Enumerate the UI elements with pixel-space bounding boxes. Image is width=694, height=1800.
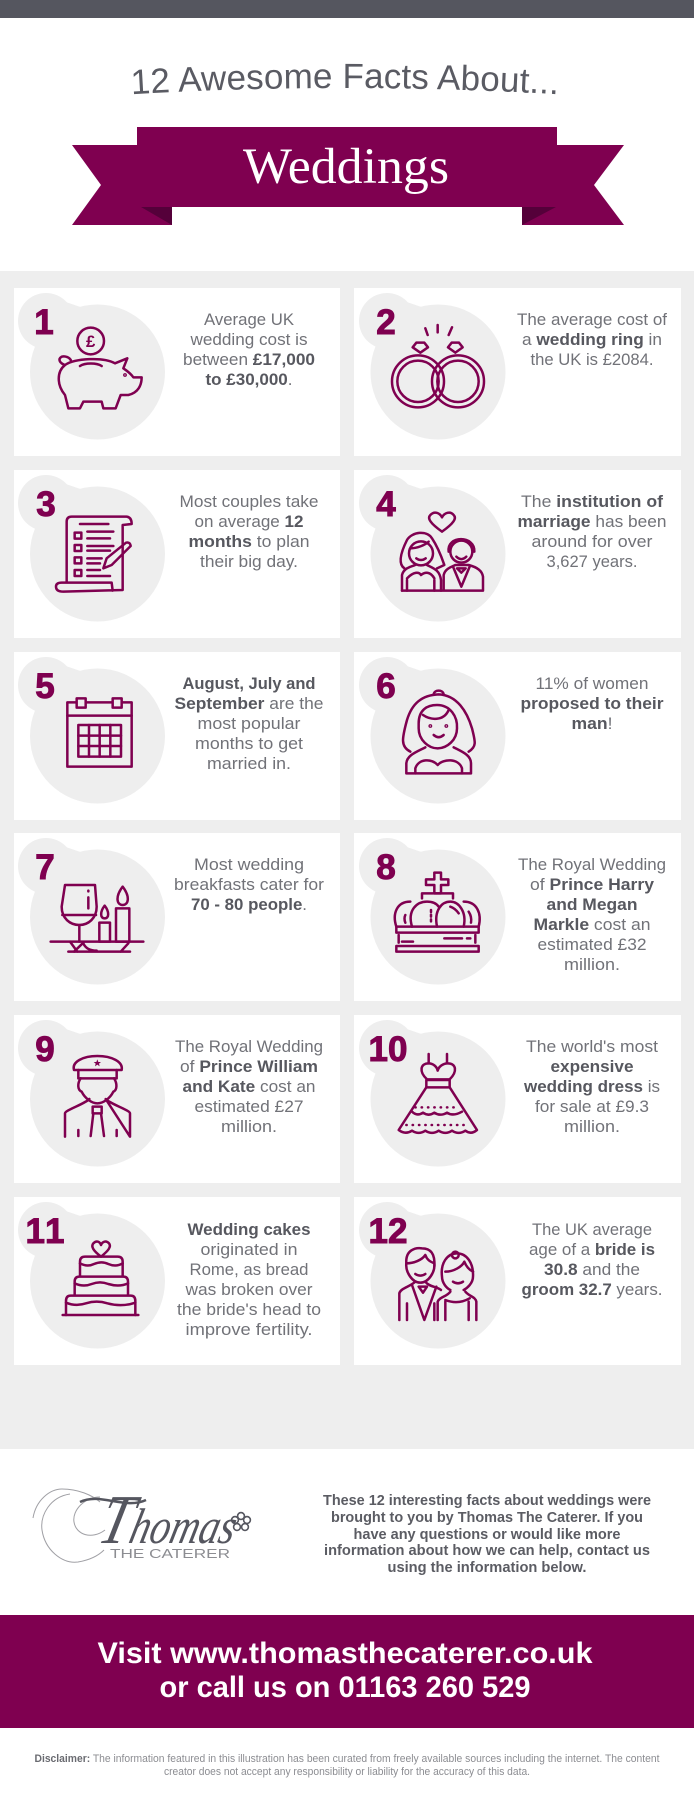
- card 12: 12: [369, 1212, 407, 1251]
- text: fact 7: breakfasts cater for: [174, 876, 325, 894]
- text: fact 4: around for over: [532, 533, 653, 551]
- text: fact 8: estimated £32: [538, 936, 646, 954]
- text: fact 4: 3,627 years.: [546, 553, 638, 571]
- text: fact 3: months to plan: [188, 533, 310, 551]
- text: fact 2: a wedding ring in: [522, 331, 662, 349]
- text: fact 5: [174, 675, 324, 773]
- card 4: 4: [376, 485, 396, 524]
- icon: bride: [403, 691, 475, 773]
- card 6: [354, 652, 681, 820]
- icon: piggy bank: [59, 328, 142, 408]
- text: fact 12: age of a bride is: [529, 1241, 655, 1259]
- grey facts panel: [0, 271, 694, 1449]
- icon: wedding dress: [399, 1054, 477, 1133]
- card 7: [14, 833, 340, 1001]
- card 8: [354, 833, 681, 1001]
- text: fact 11: Rome, as bread: [190, 1261, 308, 1279]
- icon: piggy bank: £: [86, 332, 96, 351]
- text: fact 5: September are the: [174, 695, 324, 713]
- text: fact 1: between £17,000: [183, 351, 315, 369]
- title: [134, 64, 556, 94]
- text: fact 4: [518, 493, 666, 571]
- icon: chauffeur: [65, 1056, 130, 1137]
- disclaimer: creator does not accept any responsibility or liability for the accuracy of this data.: [164, 1766, 530, 1778]
- text: fact 6: man!: [572, 715, 612, 733]
- card 3: [14, 470, 340, 638]
- card 7: 7: [35, 848, 55, 887]
- text: fact 1: [183, 311, 315, 389]
- icon: crown: [395, 873, 480, 952]
- text: fact 12: groom 32.7 years.: [522, 1281, 662, 1299]
- text: fact 7: [174, 856, 325, 914]
- card 10: [354, 1015, 681, 1183]
- text: fact 10: wedding dress is: [523, 1078, 660, 1096]
- text: fact 10: expensive: [550, 1058, 634, 1076]
- text: fact 9: The Royal Wedding: [175, 1038, 323, 1056]
- text: fact 10: for sale at £9.3: [535, 1098, 649, 1116]
- text: fact 3: their big day.: [200, 553, 298, 571]
- text: fact 8: of Prince Harry: [530, 876, 655, 894]
- text: fact 11: the bride's head to: [177, 1301, 321, 1319]
- icon: calendar: [67, 698, 132, 767]
- text: fact 1: to £30,000.: [206, 371, 292, 389]
- text: fact 5: August, July and: [182, 675, 316, 693]
- card 11: [14, 1197, 340, 1365]
- text: about the caterer: using the information below.: [388, 1560, 586, 1576]
- text: fact 1: Average UK: [204, 311, 294, 329]
- text: fact 9: and Kate cost an: [182, 1078, 316, 1096]
- text: fact 2: The average cost of: [517, 311, 667, 329]
- logo: Thomas The Caterer: THE CATERER: [110, 1546, 230, 1561]
- text: fact 6: proposed to their: [520, 695, 664, 713]
- text: fact 11: originated in: [200, 1241, 298, 1259]
- card 1: [14, 288, 340, 456]
- text: fact 7: 70 - 80 people.: [191, 896, 307, 914]
- text: fact 12: 30.8 and the: [544, 1261, 640, 1279]
- text: fact 4: marriage has been: [518, 513, 666, 531]
- text: fact 2: [517, 311, 667, 369]
- text: fact 7: Most wedding: [194, 856, 304, 874]
- card 2: 2: [376, 303, 396, 342]
- text: fact 11: [177, 1221, 321, 1339]
- card 3: 3: [36, 485, 56, 524]
- text: fact 12: The UK average: [532, 1221, 652, 1239]
- icon: checklist: [56, 517, 132, 592]
- text: about the caterer: have any questions or would like more: [354, 1527, 620, 1543]
- top bar: [0, 0, 694, 18]
- text: about the caterer: information about how we can help, contact us: [324, 1543, 650, 1559]
- text: about the caterer: brought to you by Thomas The Caterer. If you: [331, 1510, 643, 1526]
- text: fact 6: [520, 675, 664, 733]
- text: fact 10: The world's most: [526, 1038, 658, 1056]
- card 9: 9: [35, 1030, 55, 1069]
- text: fact 11: was broken over: [184, 1281, 313, 1299]
- card 4: [354, 470, 681, 638]
- title: 12 Awesome Facts About...: [134, 64, 556, 94]
- text: fact 2: the UK is £2084.: [530, 351, 654, 369]
- text: fact 5: married in.: [207, 755, 291, 773]
- text: fact 9: estimated £27: [194, 1098, 304, 1116]
- icon: bride and groom: [401, 513, 483, 591]
- text: fact 11: improve fertility.: [186, 1321, 312, 1339]
- text: fact 9: [175, 1038, 323, 1136]
- text: about the caterer: These 12 interesting facts about weddings were: [323, 1493, 651, 1509]
- text: fact 4: The institution of: [521, 493, 664, 511]
- card 8: 8: [376, 848, 396, 887]
- disclaimer: Disclaimer: The information featured in this illustration has been curated from freely available sources including the internet. The content: [34, 1753, 660, 1765]
- card 11: 11: [26, 1212, 66, 1251]
- logo: Thomas The Caterer: Thomas: [92, 1482, 247, 1559]
- card 6: 6: [376, 667, 396, 706]
- card 5: 5: [35, 667, 55, 706]
- text: fact 10: million.: [564, 1118, 620, 1136]
- text: fact 11: Wedding cakes: [188, 1221, 310, 1239]
- text: fact 1: wedding cost is: [189, 331, 308, 349]
- ribbon banner: [72, 127, 624, 225]
- logo: Thomas The Caterer: [33, 1482, 250, 1562]
- card 2: [354, 288, 681, 456]
- icon: young couple: [399, 1248, 476, 1320]
- text: fact 3: on average 12: [194, 513, 304, 531]
- card 9: [14, 1015, 340, 1183]
- card 12: [354, 1197, 681, 1365]
- text: fact 12: [522, 1221, 662, 1299]
- text: fact 8: and Megan: [546, 896, 638, 914]
- card 1: 1: [34, 303, 54, 342]
- call to action band: or call us on 01163 260 529: [160, 1671, 530, 1704]
- card 5: [14, 652, 340, 820]
- text: fact 10: [523, 1038, 660, 1136]
- text: fact 6: 11% of women: [536, 675, 648, 693]
- text: fact 9: of Prince William: [180, 1058, 318, 1076]
- text: fact 8: million.: [564, 956, 620, 974]
- text: fact 9: million.: [221, 1118, 277, 1136]
- card 10: 10: [369, 1030, 407, 1069]
- text: fact 8: Markle cost an: [534, 916, 650, 934]
- text: fact 5: most popular: [198, 715, 301, 733]
- text: fact 3: [180, 493, 318, 571]
- text: fact 8: The Royal Wedding: [518, 856, 666, 874]
- text: fact 5: months to get: [195, 735, 303, 753]
- icon: wedding cake: [63, 1242, 138, 1315]
- text: fact 3: Most couples take: [180, 493, 318, 511]
- text: about the caterer: [323, 1493, 651, 1576]
- call to action band: [0, 1615, 694, 1728]
- ribbon banner: Weddings: [243, 139, 449, 195]
- text: fact 8: [518, 856, 666, 974]
- icon: wine glass and candles: [51, 885, 143, 952]
- call to action band: Visit www.thomasthecaterer.co.uk: [98, 1637, 593, 1670]
- icon: wedding rings: [392, 325, 484, 407]
- disclaimer: [34, 1753, 660, 1778]
